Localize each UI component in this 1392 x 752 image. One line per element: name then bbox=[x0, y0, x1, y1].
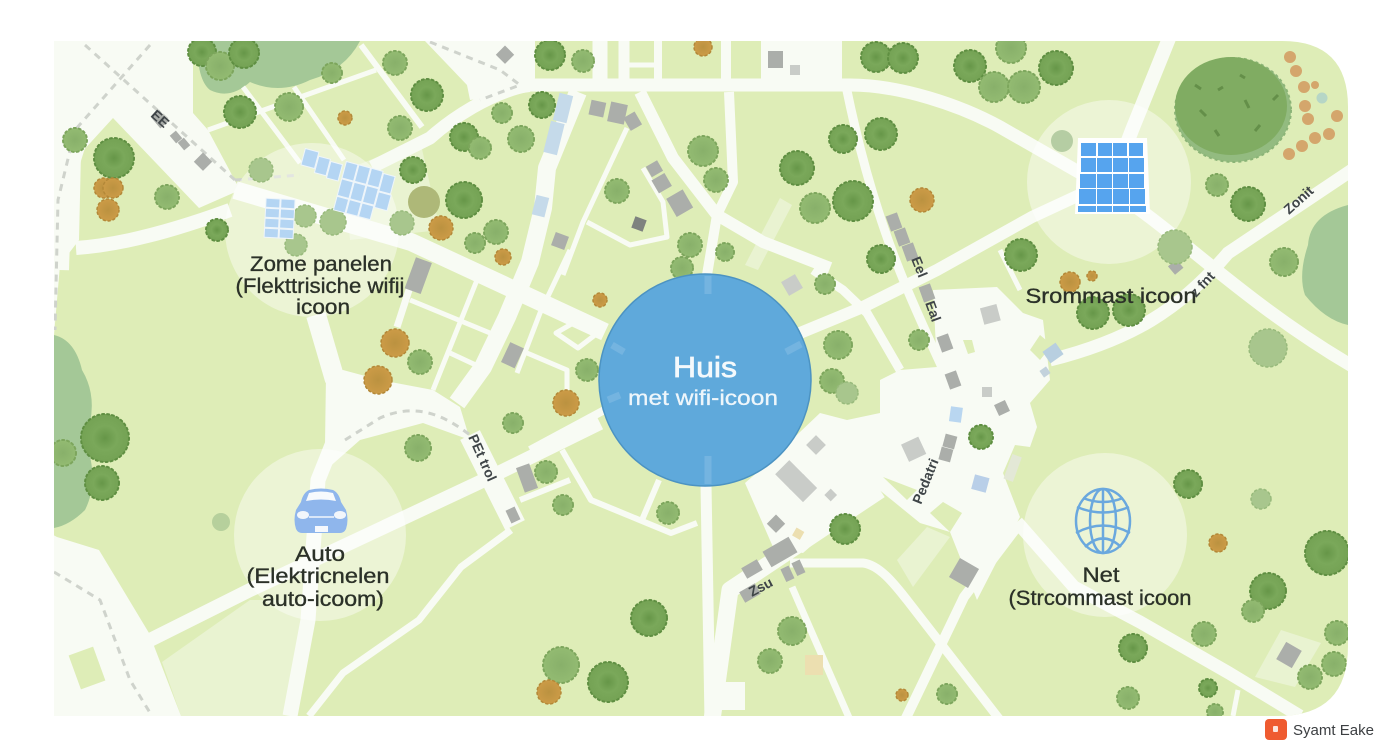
pale blue and tan small buildings bbox=[532, 93, 1064, 710]
street labels bbox=[148, 106, 1317, 600]
label: grid: (Strcommast icoon bbox=[1008, 587, 1192, 610]
label: solar panels: icoon bbox=[296, 296, 350, 319]
hub subheading: met wifi-icoon bbox=[628, 387, 778, 410]
hub heading: Huis bbox=[673, 352, 737, 384]
label: car: Auto bbox=[295, 543, 345, 566]
translucent icon halos bbox=[225, 100, 1191, 621]
icon: small solar panels bbox=[264, 148, 397, 239]
label: car: (Elektricnelen bbox=[246, 565, 390, 588]
street labels: z fnt bbox=[1186, 268, 1218, 300]
icon: electric car bbox=[294, 488, 348, 533]
street labels: Pedatri bbox=[909, 456, 942, 506]
label: solar panels: Zome panelen bbox=[250, 253, 392, 276]
icon: globe network bbox=[1076, 489, 1130, 553]
white paved areas bbox=[40, 30, 1050, 716]
dashed paths bbox=[54, 42, 520, 716]
icon: solar panel bbox=[1075, 138, 1150, 214]
street labels: PEt trol bbox=[465, 432, 500, 484]
dark green ponds bbox=[54, 41, 1348, 528]
label: grid bbox=[1008, 564, 1192, 610]
large tree canopy bbox=[1175, 57, 1291, 162]
green lots in paved area bbox=[69, 285, 1055, 689]
street labels: Zonit bbox=[1280, 182, 1317, 217]
icon: house hub circle bbox=[599, 274, 811, 486]
buildings bbox=[151, 46, 1302, 668]
label: solar panels bbox=[236, 253, 404, 319]
watermark badge bbox=[1265, 719, 1374, 740]
watermark badge: Syamt Eake bbox=[1293, 722, 1374, 739]
orange shrubs bbox=[1283, 51, 1343, 160]
street labels: Eal bbox=[922, 299, 944, 324]
street labels: EE bbox=[148, 106, 173, 131]
label: solar panels: (Flekttrisiche wifij bbox=[236, 275, 404, 298]
label: grid: Net bbox=[1082, 564, 1120, 587]
lighter lawns bbox=[162, 140, 1321, 716]
label: car bbox=[246, 543, 390, 611]
street labels: Zsu bbox=[746, 574, 775, 600]
street labels: Eel bbox=[908, 254, 931, 280]
label: power mast: Srommast icoon bbox=[1026, 285, 1196, 308]
label: car: auto-icoom) bbox=[262, 588, 384, 611]
